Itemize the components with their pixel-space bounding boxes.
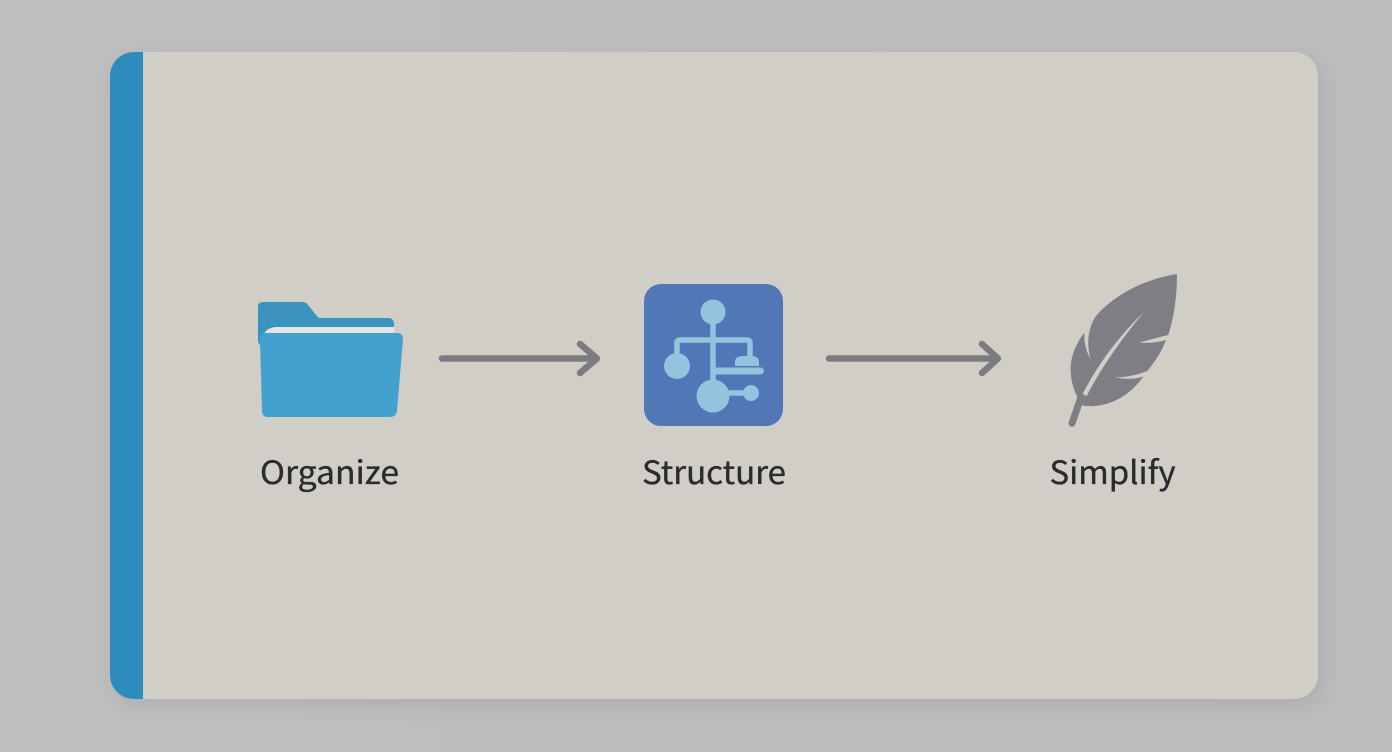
label: Simplify: Simplify	[1050, 448, 1176, 494]
arrow: structure to simplify	[829, 344, 998, 373]
icon: feather	[1071, 274, 1177, 423]
label: Structure: Structure	[642, 448, 786, 494]
panel: card	[110, 52, 1324, 705]
icon: folder	[258, 302, 403, 417]
arrow: organize to structure	[442, 344, 597, 373]
accent bar	[110, 52, 143, 699]
infographic canvas	[110, 52, 1324, 706]
icon: structure diagram	[644, 284, 783, 426]
label: Organize: Organize	[260, 448, 399, 494]
